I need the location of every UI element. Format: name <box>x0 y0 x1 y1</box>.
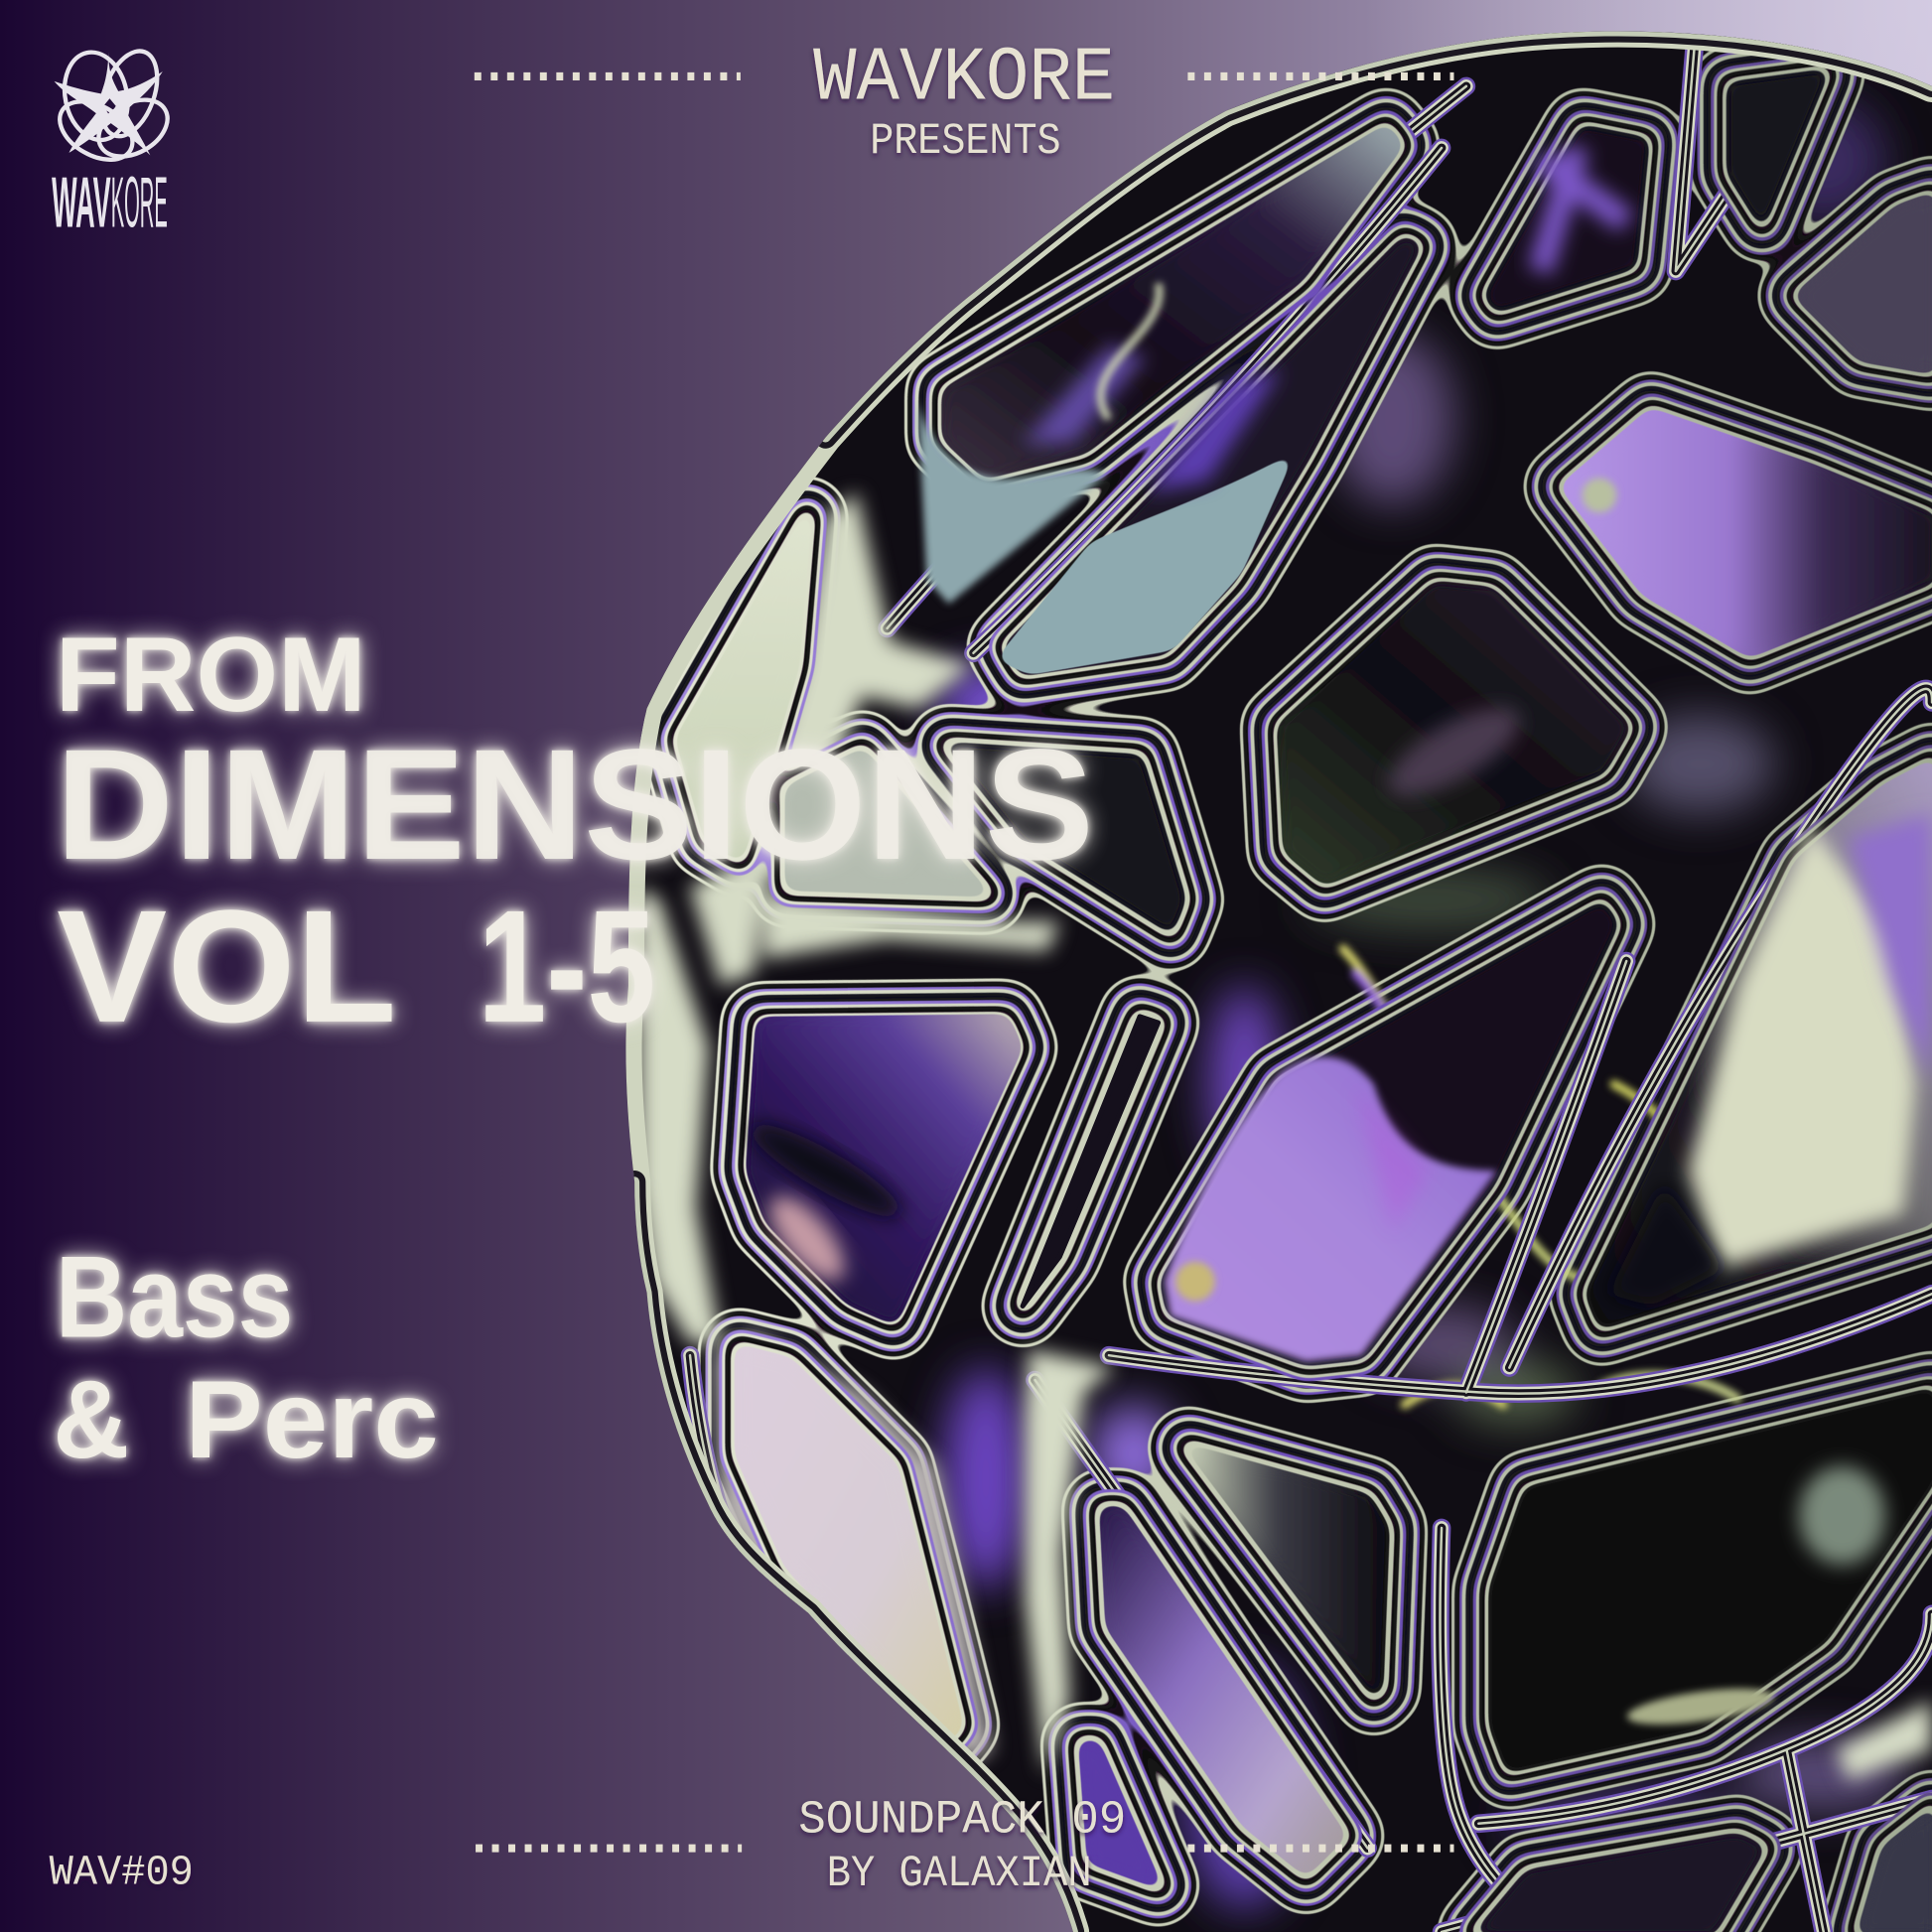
title block <box>56 615 1094 1056</box>
cell: large pale right pane <box>1589 763 1932 1324</box>
title line: volume: 1-5 <box>479 878 655 1056</box>
cell: top small pane <box>1731 73 1824 221</box>
dotted rule: top left <box>475 73 741 79</box>
logo: wordmark: WAV <box>52 163 111 242</box>
glass ridges: long curved strands <box>690 50 1932 1932</box>
cell: large purple pane <box>1165 905 1614 1361</box>
glass network: inner rings around cells <box>680 73 1932 1932</box>
glass network: outer contour rings <box>680 73 1932 1932</box>
subtitle line: bass: Bass <box>56 1232 293 1362</box>
title line: volume <box>57 878 655 1056</box>
cell: dark upper pane with teal swoosh <box>918 129 1399 604</box>
subtitle line: and perc: Perc <box>185 1357 439 1481</box>
footer: catalogue number: WAV#09 <box>50 1850 194 1897</box>
cell: pale teal pane behind title <box>788 752 986 894</box>
cell: grey teal pane <box>1189 1448 1386 1694</box>
cell: lower right pane <box>1861 1811 1932 1932</box>
footer: soundpack label: SOUNDPACK 09 <box>798 1794 1126 1847</box>
cell: bottom pane <box>1478 1836 1762 1932</box>
footer: artist credit: BY GALAXIAN <box>827 1850 1092 1899</box>
glass cells <box>680 73 1932 1932</box>
glass sphere artwork <box>625 32 1932 1932</box>
cell: long lilac pane <box>1103 1509 1343 1872</box>
subtitle line: and perc: & <box>53 1357 129 1481</box>
subtitle block <box>53 1232 439 1481</box>
subtitle line: and perc <box>53 1357 439 1481</box>
text: KORE <box>111 163 168 242</box>
cell: dark pane behind title <box>949 746 1182 930</box>
cell: big dark lower pane <box>1493 1392 1932 1768</box>
cell: thin dark sliver <box>1023 1017 1159 1307</box>
sphere rim glass bands <box>625 32 1932 1932</box>
cell: teal pane <box>996 240 1417 675</box>
pale glass webbing on the left rim <box>638 492 1932 1780</box>
dotted rule: top right <box>1187 73 1453 79</box>
iridescent squiggles <box>1343 949 1737 1405</box>
title line: dimensions: DIMENSIONS <box>56 716 1094 893</box>
dotted rule: bottom left <box>476 1845 742 1852</box>
dotted rule: bottom right <box>1187 1845 1453 1852</box>
logo: reel emblem <box>50 44 178 172</box>
cell: dark central pane <box>1282 586 1626 881</box>
cell: dark purple pane <box>741 1021 1017 1318</box>
header: brand name: WAVKORE <box>813 36 1115 122</box>
cell: pale left pane <box>680 517 807 857</box>
iridescent reflections between the cells <box>936 98 1910 1910</box>
cell: purple diamond pane <box>1565 413 1932 653</box>
cell: upper dark pane <box>1488 129 1645 308</box>
cell: small purple triangle pane <box>1082 1743 1159 1885</box>
cell: pale pink pane <box>740 1349 959 1737</box>
title line: volume: VOL <box>57 878 397 1056</box>
title line: from: FROM <box>56 615 366 734</box>
header: presents: PRESENTS <box>870 117 1061 167</box>
cell: top right pane <box>1799 198 1932 369</box>
